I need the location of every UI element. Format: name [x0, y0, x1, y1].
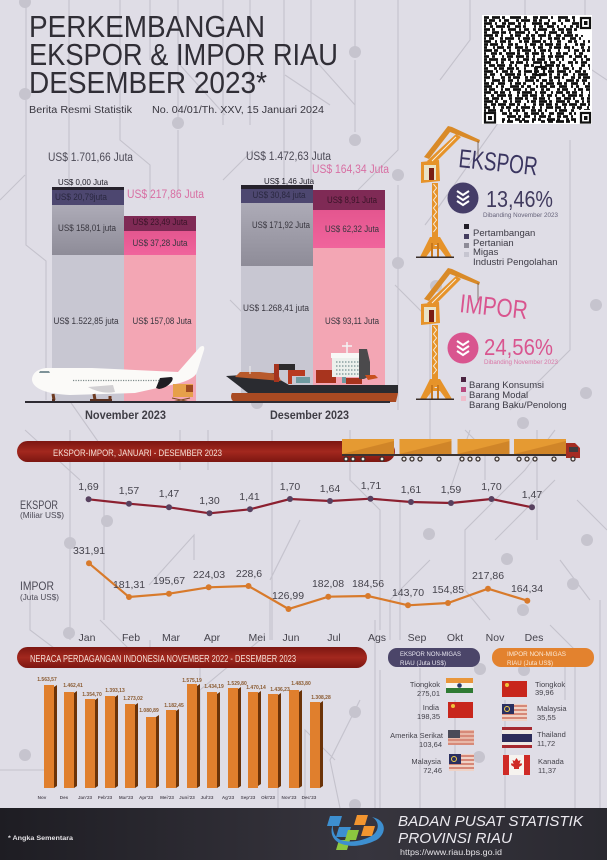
bar chart: neraca perdagangan: Apr'23 — [139, 795, 153, 800]
QR code — [482, 15, 592, 124]
line chart: impor: 217,86 — [472, 570, 504, 582]
bar chart: neraca perdagangan: 1.393,13 — [105, 688, 125, 694]
pill: impor non-migas: RIAU (Juta US$) — [507, 660, 553, 667]
legend: impor — [461, 377, 567, 411]
panel: stacked bars November 2023: US$ 0,00 Juta — [58, 177, 108, 187]
subtitle: Berita Resmi Statistik — [29, 105, 133, 116]
list: ekspor countries: 275,01 — [417, 689, 440, 698]
month axis: Jan — [79, 632, 96, 644]
line chart: ekspor: 1,47 — [159, 488, 179, 500]
legend: impor: Barang Modal — [469, 390, 528, 401]
agency name: BADAN PUSAT STATISTIK — [398, 813, 584, 830]
month axis: Apr — [204, 632, 221, 644]
heading: EKSPOR: EKSPOR — [457, 143, 539, 181]
panel: stacked bars November 2023: US$ 158,01 juta — [58, 223, 116, 233]
bar chart: neraca perdagangan: Feb'23 — [98, 795, 113, 800]
bar chart: neraca perdagangan: 1.483,80 — [291, 681, 311, 687]
agency name: PROVINSI RIAU — [398, 830, 512, 847]
line chart: impor: 164,34 — [511, 583, 543, 595]
list: impor countries: 35,55 — [537, 713, 556, 722]
list: ekspor countries: 72,46 — [423, 766, 442, 775]
line chart: impor: 126,99 — [272, 590, 304, 602]
panel: stacked bars November 2023: US$ 23,49 Juta — [132, 217, 188, 227]
bar chart: neraca perdagangan: Des — [60, 795, 69, 800]
panel: stacked bars Desember 2023: US$ 171,92 Juta — [252, 220, 310, 230]
stat: impor change: 24,56% — [484, 334, 553, 360]
legend: ekspor — [464, 224, 558, 268]
bar chart: neraca perdagangan: 1.462,41 — [63, 683, 83, 689]
bar chart: neraca perdagangan: Mei'23 — [160, 795, 174, 800]
line chart: impor: 154,85 — [432, 584, 464, 596]
bar chart: neraca perdagangan: 1.529,80 — [227, 681, 247, 687]
agency name — [398, 813, 584, 847]
bar chart: neraca perdagangan: Okt'23 — [261, 795, 275, 800]
bar chart: neraca perdagangan: 1.470,14 — [246, 685, 266, 691]
import total label: US$ 217,86 Juta — [127, 189, 205, 201]
icon: down chevrons impor — [448, 332, 478, 364]
bar chart: neraca perdagangan: 1.273,02 — [123, 696, 143, 702]
panel: stacked bars November 2023: US$ 157,08 Juta — [132, 316, 192, 326]
flag: Thailand — [502, 727, 532, 748]
banner: ekspor-impor: EKSPOR-IMPOR, JANUARI - DESEMBER 2023 — [53, 448, 222, 458]
legend: impor: Barang Konsumsi — [469, 380, 544, 391]
line chart: ekspor: 1,30 — [199, 495, 220, 507]
chart label: ekspor: (Miliar US$) — [20, 511, 64, 520]
line chart: ekspor: 1,70 — [481, 481, 502, 493]
line chart: impor — [73, 545, 543, 612]
line chart: ekspor: 1,69 — [78, 481, 99, 493]
list: impor countries: Malaysia — [537, 704, 567, 713]
title — [29, 9, 338, 100]
line chart: impor: 181,31 — [113, 579, 145, 591]
legend: ekspor: Industri Pengolahan — [473, 257, 558, 268]
flag: China — [448, 702, 473, 718]
month axis: Sep — [408, 632, 426, 644]
month axis: Jul — [327, 632, 341, 644]
month axis: Nov — [486, 632, 505, 644]
list: ekspor countries: Tiongkok — [410, 680, 440, 689]
bar chart: neraca perdagangan: 1.354,70 — [82, 692, 102, 698]
icon: airplane — [32, 346, 204, 401]
banner: ekspor-impor — [17, 441, 395, 462]
title: EKSPOR & IMPOR RIAU — [29, 37, 338, 72]
icon: truck — [342, 439, 580, 461]
url: https://www.riau.bps.go.id — [400, 848, 502, 857]
list: impor countries: 11,72 — [537, 739, 555, 748]
line chart: ekspor: 1,57 — [119, 485, 139, 497]
list: ekspor countries: 103,64 — [419, 740, 442, 749]
bar chart: neraca perdagangan — [37, 677, 331, 800]
bar chart: neraca perdagangan: 1.563,57 — [37, 677, 57, 683]
month axis: Jun — [283, 632, 300, 644]
pill: ekspor non-migas: EKSPOR NON-MIGAS — [400, 651, 462, 658]
line chart: impor: 228,6 — [236, 568, 262, 580]
pill: ekspor non-migas — [388, 648, 480, 667]
bar chart: neraca perdagangan: Jan'23 — [78, 795, 93, 800]
line chart: ekspor: 1,71 — [361, 480, 381, 492]
pill: ekspor non-migas: RIAU (Juta US$) — [400, 660, 446, 667]
banner: neraca perdagangan — [17, 647, 367, 668]
line chart: ekspor — [78, 480, 542, 516]
export total label: US$ 1.701,66 Juta — [48, 152, 134, 164]
panel: stacked bars November 2023 — [48, 152, 205, 402]
line chart: impor: 224,03 — [193, 569, 225, 581]
line chart: ekspor: 1,47 — [522, 489, 542, 501]
bar chart: neraca perdagangan: Nov'23 — [282, 795, 297, 800]
list: impor countries: 39,96 — [535, 688, 554, 697]
title: PERKEMBANGAN — [29, 9, 265, 44]
month axis — [79, 632, 543, 644]
logo: BPS — [327, 815, 384, 850]
caption impor: Dibanding November 2023 — [484, 360, 559, 366]
icon: down chevrons ekspor — [448, 182, 478, 214]
flag: USA — [448, 730, 474, 745]
chart label: impor: (Juta US$) — [20, 593, 59, 602]
legend: ekspor: Pertambangan — [473, 228, 535, 239]
panel: stacked bars Desember 2023: US$ 30,84 juta — [252, 190, 306, 200]
month axis: Mei — [249, 632, 265, 644]
footer — [0, 808, 607, 860]
list: impor countries: Thailand — [537, 730, 566, 739]
list: ekspor countries — [390, 680, 444, 775]
month axis: Okt — [447, 632, 463, 644]
stat: ekspor change: 13,46% — [486, 186, 553, 212]
legend: ekspor: Migas — [473, 247, 499, 258]
bar chart: neraca perdagangan: Jul'23 — [201, 795, 214, 800]
chart label: ekspor — [20, 500, 64, 520]
panel: stacked bars November 2023: US$ 37,28 Juta — [132, 238, 188, 248]
line chart: ekspor: 1,70 — [280, 481, 300, 493]
line chart: impor: 331,91 — [73, 545, 105, 557]
subtitle — [29, 105, 324, 116]
icon: crane ekspor — [416, 126, 480, 258]
bar chart: neraca perdagangan: 1.434,19 — [204, 684, 224, 690]
month axis: Feb — [122, 632, 140, 644]
panel: stacked bars Desember 2023: US$ 93,11 Juta — [325, 316, 379, 326]
list: impor countries — [535, 680, 567, 775]
banner: neraca perdagangan: NERACA PERDAGANGAN INDONESIA NOVEMBER 2022 - DESEMBER 2023 — [30, 654, 296, 665]
footnote: * Angka Sementara — [8, 835, 73, 842]
panel: stacked bars Desember 2023: US$ 1.268,41 juta — [243, 303, 309, 313]
bar chart: neraca perdagangan: Nov — [38, 795, 47, 800]
icon: crane impor — [416, 268, 480, 400]
bar chart: neraca perdagangan: Juni'23 — [179, 795, 195, 800]
flag: Canada — [503, 755, 530, 775]
list: impor countries: 11,37 — [538, 766, 556, 775]
line chart: impor: 195,67 — [153, 575, 185, 587]
month axis: Mar — [162, 632, 181, 644]
line chart: ekspor: 1,41 — [239, 491, 260, 503]
bar chart: neraca perdagangan: Dec'23 — [302, 795, 317, 800]
panel: stacked bars November 2023: US$ 1.522,85 juta — [54, 316, 118, 326]
caption ekspor: Dibanding November 2023 — [483, 213, 559, 219]
bar chart: neraca perdagangan: 1.308,28 — [311, 695, 331, 701]
panel: stacked bars Desember 2023 — [241, 151, 390, 402]
legend: impor: Barang Baku/Penolong — [469, 400, 567, 411]
panel: stacked bars Desember 2023: US$ 62,32 Juta — [325, 224, 379, 234]
month label November: November 2023 — [85, 408, 166, 422]
title: DESEMBER 2023* — [29, 65, 267, 100]
pill: impor non-migas: IMPOR NON-MIGAS — [507, 651, 567, 658]
line chart: ekspor: 1,61 — [401, 484, 421, 496]
line chart: impor: 182,08 — [312, 578, 344, 590]
line chart: impor: 143,70 — [392, 587, 424, 599]
panel: stacked bars Desember 2023: US$ 1,46 Juta — [264, 176, 314, 186]
bar chart: neraca perdagangan: 1.575,19 — [182, 678, 202, 684]
line chart: ekspor: 1,64 — [320, 483, 340, 495]
line chart: impor: 184,56 — [352, 578, 384, 590]
bar chart: neraca perdagangan: Mar'23 — [119, 795, 134, 800]
list: impor countries: Kanada — [538, 757, 565, 766]
legend: ekspor: Pertanian — [473, 238, 514, 249]
flag: Malaysia (impor) — [502, 704, 527, 721]
bar chart: neraca perdagangan: Sep'23 — [241, 795, 256, 800]
list: impor countries: Tiongkok — [535, 680, 565, 689]
chart label: impor: IMPOR — [20, 581, 54, 593]
list: ekspor countries: Malaysia — [411, 757, 442, 766]
month axis: Des — [525, 632, 543, 644]
ground line — [25, 401, 390, 403]
pill: impor non-migas — [492, 648, 594, 667]
bar chart: neraca perdagangan: 1.436,23 — [270, 687, 290, 693]
panel: stacked bars Desember 2023: US$ 1.472,63 Juta — [246, 151, 332, 163]
icon: cargo ship — [226, 342, 398, 402]
list: ekspor countries: India — [423, 703, 440, 712]
bar chart: neraca perdagangan: Ag'23 — [222, 795, 235, 800]
list: ekspor countries: 198,35 — [417, 712, 440, 721]
month label Desember: Desember 2023 — [270, 408, 349, 422]
chart label: impor — [20, 581, 59, 602]
line chart: ekspor: 1,59 — [441, 484, 461, 496]
panel: stacked bars November 2023: US$ 20,79juta — [55, 192, 107, 202]
subtitle: No. 04/01/Th. XXV, 15 Januari 2024 — [152, 105, 324, 116]
icon: cargo loader — [170, 384, 193, 402]
bar chart: neraca perdagangan: 1.080,89 — [139, 708, 159, 714]
bar chart: neraca perdagangan: 1.182,45 — [164, 703, 184, 709]
list: ekspor countries: Amerika Serikat — [390, 731, 444, 740]
panel: stacked bars Desember 2023: US$ 8,91 Juta — [327, 195, 377, 205]
flag: Malaysia — [449, 754, 474, 771]
flag: India — [446, 678, 473, 693]
panel: stacked bars Desember 2023: US$ 164,34 Juta — [312, 164, 390, 176]
chart label: ekspor: EKSPOR — [20, 500, 58, 512]
heading: IMPOR: IMPOR — [458, 288, 529, 325]
flag: China (impor) — [502, 681, 527, 697]
month axis: Ags — [368, 632, 386, 644]
